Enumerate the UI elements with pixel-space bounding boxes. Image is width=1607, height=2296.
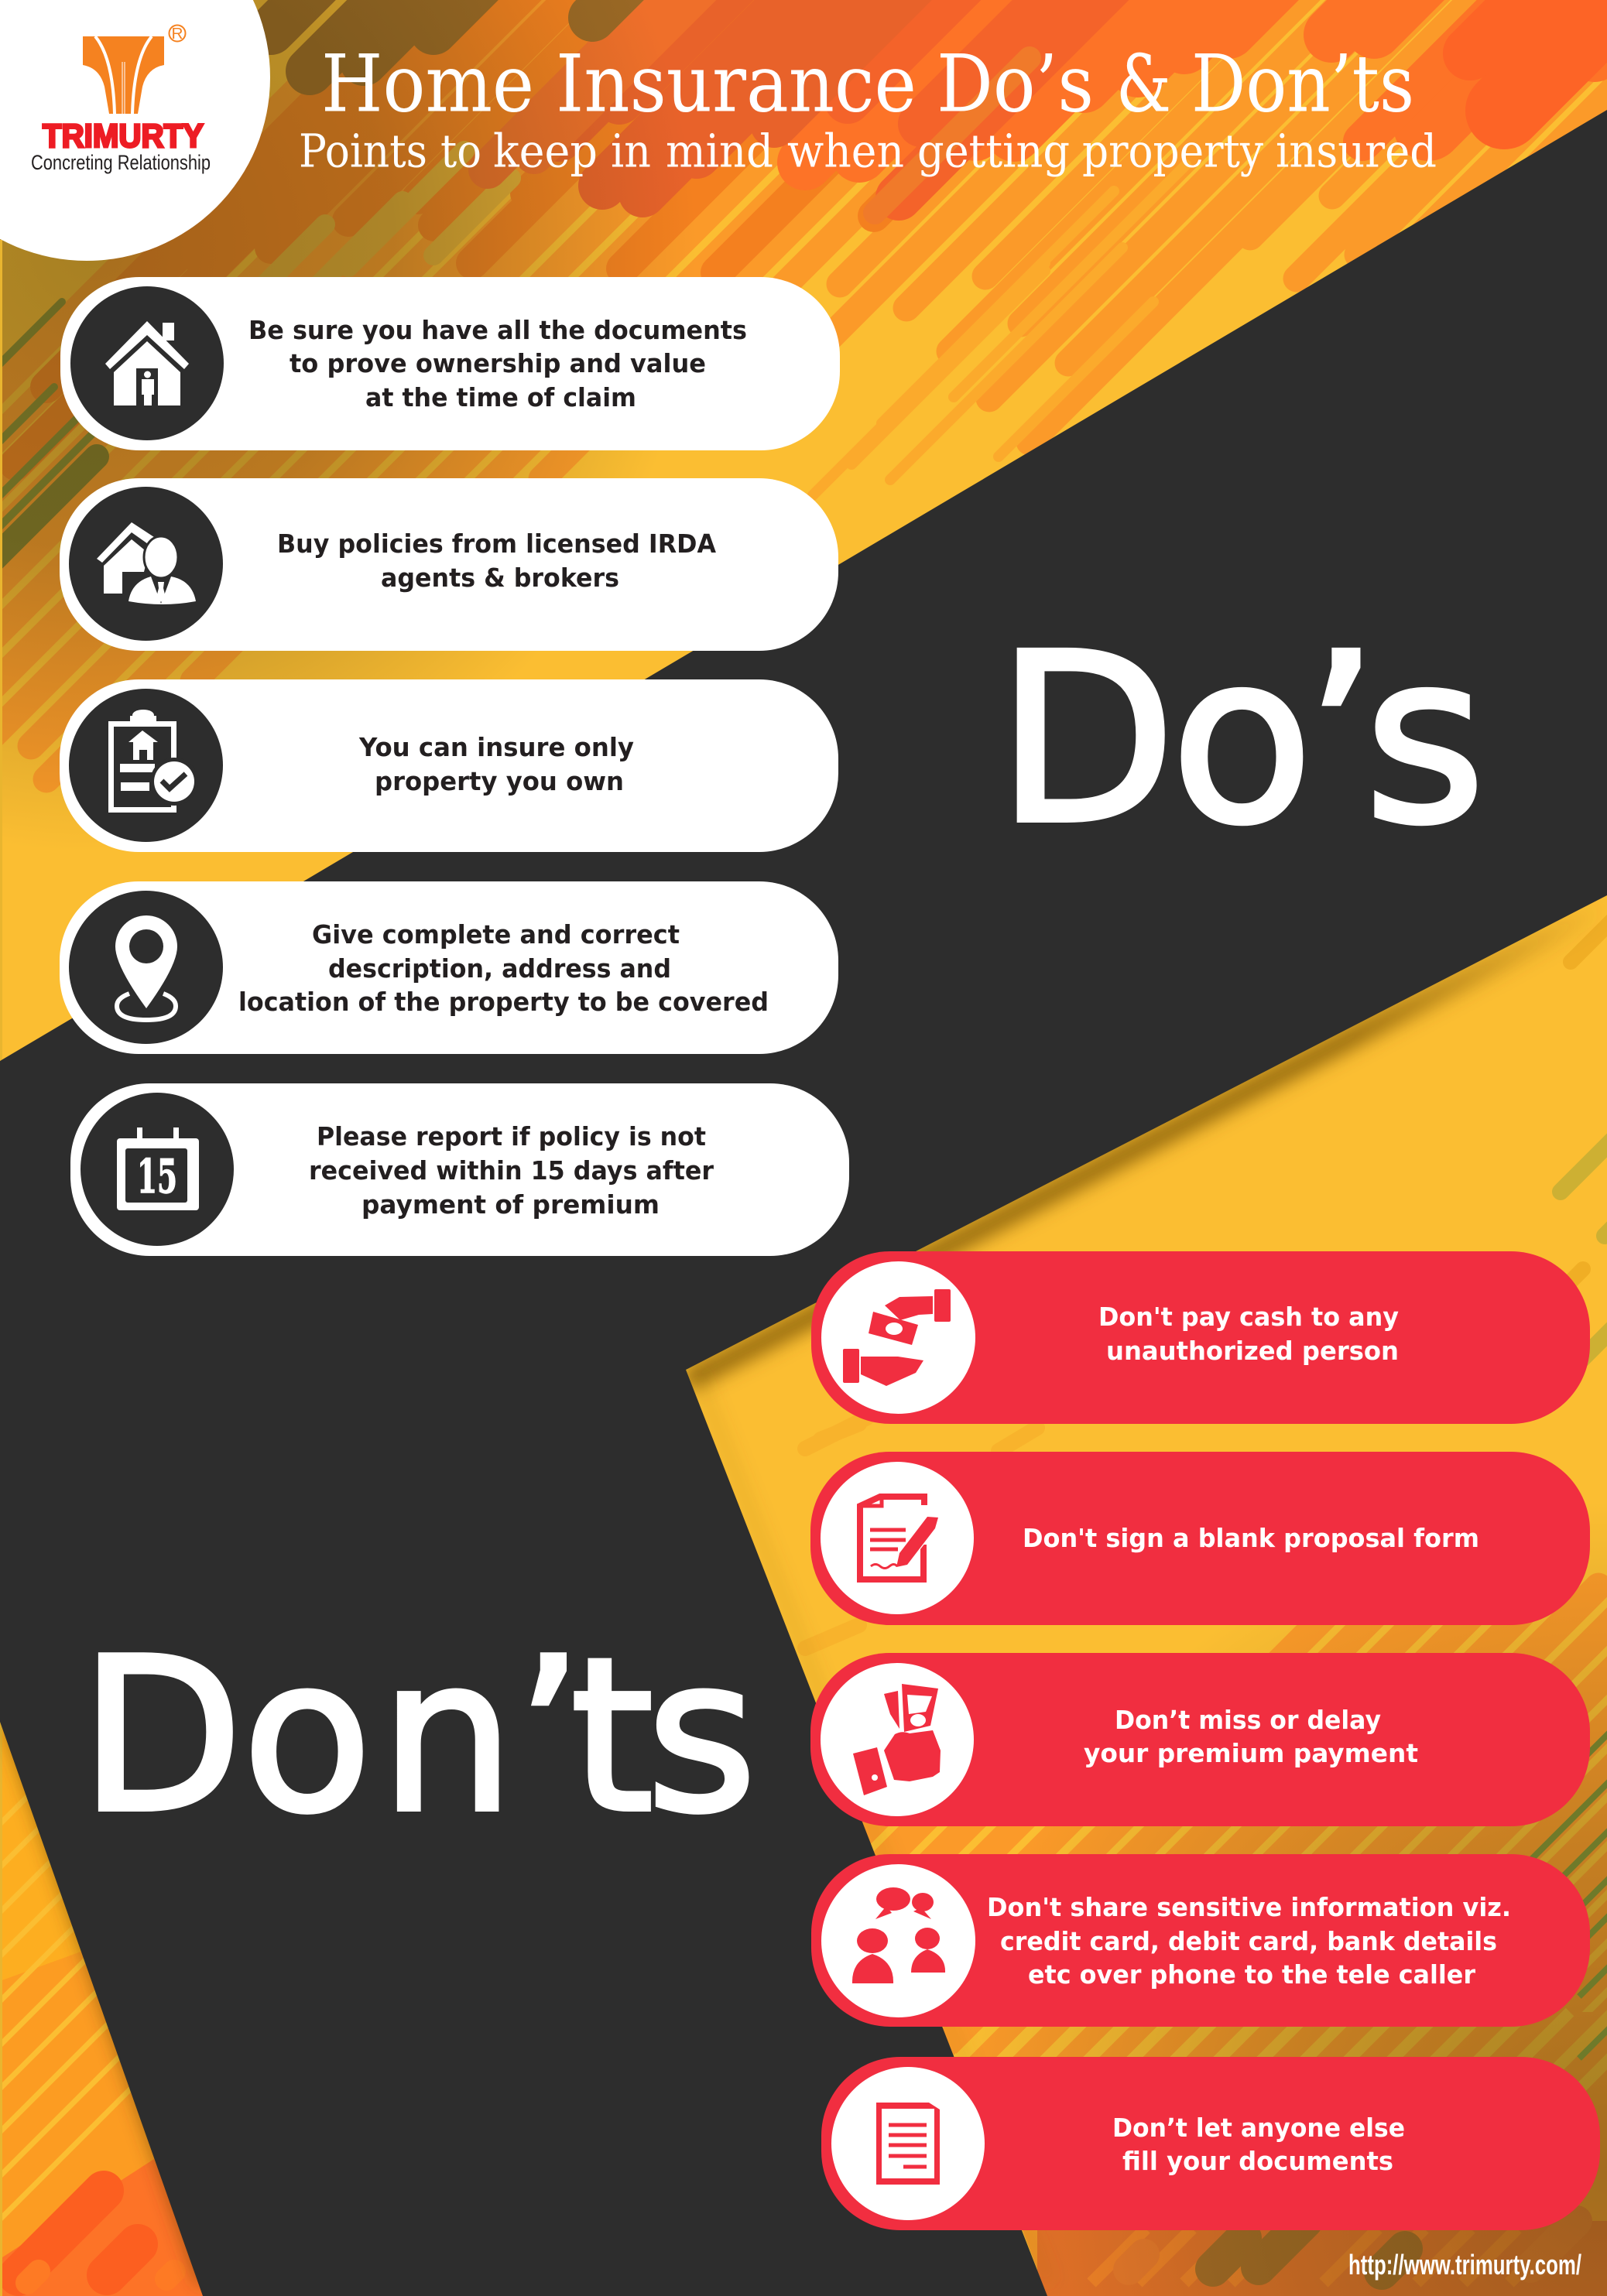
text: Be sure you have all the documents — [248, 315, 747, 345]
panel: do 1 documents — [60, 277, 840, 450]
subtitle: property — [1082, 124, 1264, 178]
text: your premium payment — [1084, 1738, 1418, 1768]
background: lower left orange corner — [0, 1716, 302, 2296]
text — [277, 529, 716, 593]
title: & — [1116, 39, 1171, 130]
background: lower right striped corner — [523, 1586, 1607, 2296]
subtitle: mind — [666, 124, 773, 178]
icon: document — [876, 2103, 940, 2185]
text: location of the property to be covered — [238, 987, 769, 1017]
icon: calendar 15 — [117, 1127, 199, 1210]
text: fill your documents — [1122, 2146, 1393, 2176]
text: Please report if policy is not — [317, 1121, 706, 1151]
text: agents & brokers — [381, 563, 619, 593]
panel: do 5 report non receipt — [70, 1083, 849, 1256]
text — [1084, 1705, 1418, 1768]
text — [358, 732, 634, 796]
text: unauthorized person — [1106, 1336, 1399, 1366]
text: property you own — [375, 766, 624, 796]
logo badge — [0, 0, 270, 261]
icon: house with person — [105, 321, 189, 405]
text: Don't sign a blank proposal form — [1023, 1523, 1479, 1553]
text: received within 15 days after — [309, 1155, 714, 1186]
title: Home — [321, 39, 534, 130]
text: etc over phone to the tele caller — [1028, 1959, 1476, 1990]
registered mark: R — [172, 26, 183, 43]
text: Don't pay cash to any — [1098, 1302, 1399, 1332]
icon: two people talking — [852, 1887, 945, 1983]
icon: cash between hands — [843, 1289, 951, 1386]
icon: form and pen — [860, 1497, 938, 1579]
text — [248, 315, 747, 412]
title — [321, 39, 1414, 130]
subtitle — [299, 124, 1437, 178]
icon: fist with money and wallet — [853, 1684, 941, 1795]
subtitle: to — [440, 124, 481, 178]
text: Don’t miss or delay — [1115, 1705, 1381, 1735]
edge shadows under the dark shape — [12, 905, 1607, 2283]
text: description, address and — [328, 953, 671, 984]
title: Do’s — [937, 39, 1094, 130]
icon: house and agent — [97, 522, 196, 604]
panel: do 4 correct description — [60, 881, 838, 1054]
subtitle: insured — [1276, 124, 1437, 178]
text: Don’t let anyone else — [1112, 2113, 1405, 2143]
text: Buy policies from licensed IRDA — [277, 529, 716, 559]
icon: trimurty T mark — [83, 36, 164, 114]
tagline: Concreting Relationship — [31, 151, 211, 174]
subtitle: Points — [299, 124, 427, 178]
text: to prove ownership and value — [290, 348, 706, 378]
panel: dont 5 fill documents — [821, 2057, 1600, 2230]
subtitle: in — [611, 124, 651, 178]
text — [309, 1121, 714, 1220]
panel: dont 4 sensitive information — [811, 1854, 1590, 2027]
icon: location pin — [115, 915, 177, 1020]
text: payment of premium — [361, 1189, 660, 1220]
text: You can insure only — [358, 732, 634, 762]
icon: calendar 15: 15 — [137, 1150, 177, 1204]
panel: do 3 own property — [60, 679, 838, 852]
icon: clipboard with check — [111, 710, 198, 809]
text — [1098, 1302, 1399, 1366]
title: Don’ts — [1191, 39, 1414, 130]
subtitle: getting — [917, 124, 1070, 178]
text: credit card, debit card, bank details — [1000, 1926, 1497, 1956]
panel: dont 3 premium — [810, 1653, 1590, 1826]
panel: dont 1 cash — [811, 1251, 1590, 1424]
title: Insurance — [556, 39, 917, 130]
text — [987, 1892, 1511, 1990]
text — [238, 919, 769, 1017]
panel: do 2 licensed agents — [60, 478, 838, 651]
heading: Do's: Do’s — [996, 604, 1485, 876]
text: Don't share sensitive information viz. — [987, 1892, 1511, 1922]
text — [1112, 2113, 1405, 2176]
brand name: TRIMURTY — [43, 118, 204, 155]
text: at the time of claim — [365, 382, 636, 412]
heading: Don'ts: Don’ts — [80, 1613, 757, 1860]
panel: dont 2 blank form — [810, 1452, 1590, 1625]
text: Give complete and correct — [312, 919, 680, 950]
subtitle: keep — [493, 124, 598, 178]
subtitle: when — [787, 124, 904, 178]
